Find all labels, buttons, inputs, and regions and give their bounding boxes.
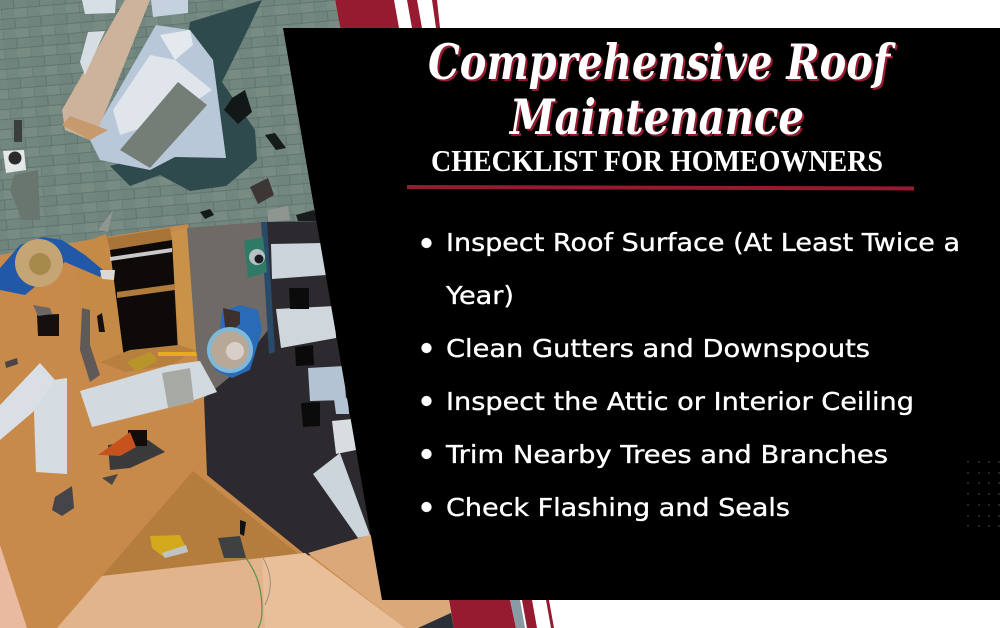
shingle roof area: [0, 0, 340, 255]
roofing material pile: [62, 0, 226, 170]
title: Comprehensive Roof: [428, 33, 896, 91]
item: inspect roof surface: [422, 228, 960, 310]
item: check flashing: Check Flashing and Seals: [446, 493, 790, 522]
title: [428, 33, 898, 148]
black content panel: [283, 28, 1000, 600]
item: trim trees: Trim Nearby Trees and Branches: [445, 440, 888, 469]
title: Maintenance: [510, 90, 806, 148]
checklist: [422, 228, 960, 522]
title divider: [407, 185, 914, 190]
bottom crimson stripes: [449, 600, 554, 628]
underlayment rolls on roof: [0, 243, 370, 538]
item: inspect roof surface: Year): [445, 281, 514, 310]
item: inspect roof surface: Inspect Roof Surface (At Least Twice a: [446, 228, 960, 257]
peach plywood sheets: [0, 535, 460, 628]
decorative dot grid: [967, 461, 1000, 527]
subtitle: CHECKLIST FOR HOMEOWNERS: [431, 143, 883, 178]
vent pipe: [3, 120, 26, 173]
item: inspect attic: Inspect the Attic or Interior Ceiling: [446, 387, 914, 416]
title: Maintenance: [508, 88, 804, 146]
item: clean gutters: Clean Gutters and Downspouts: [446, 334, 870, 363]
roof photo: [0, 0, 460, 628]
worker with straw hat: [0, 237, 115, 295]
plywood deck: [0, 224, 298, 576]
top crimson stripes: [335, 0, 440, 28]
power tools on deck: [98, 432, 246, 558]
worker with white hat: [207, 305, 262, 378]
grey and dark underlayment: [187, 221, 375, 556]
title: Comprehensive Roof: [430, 35, 898, 93]
